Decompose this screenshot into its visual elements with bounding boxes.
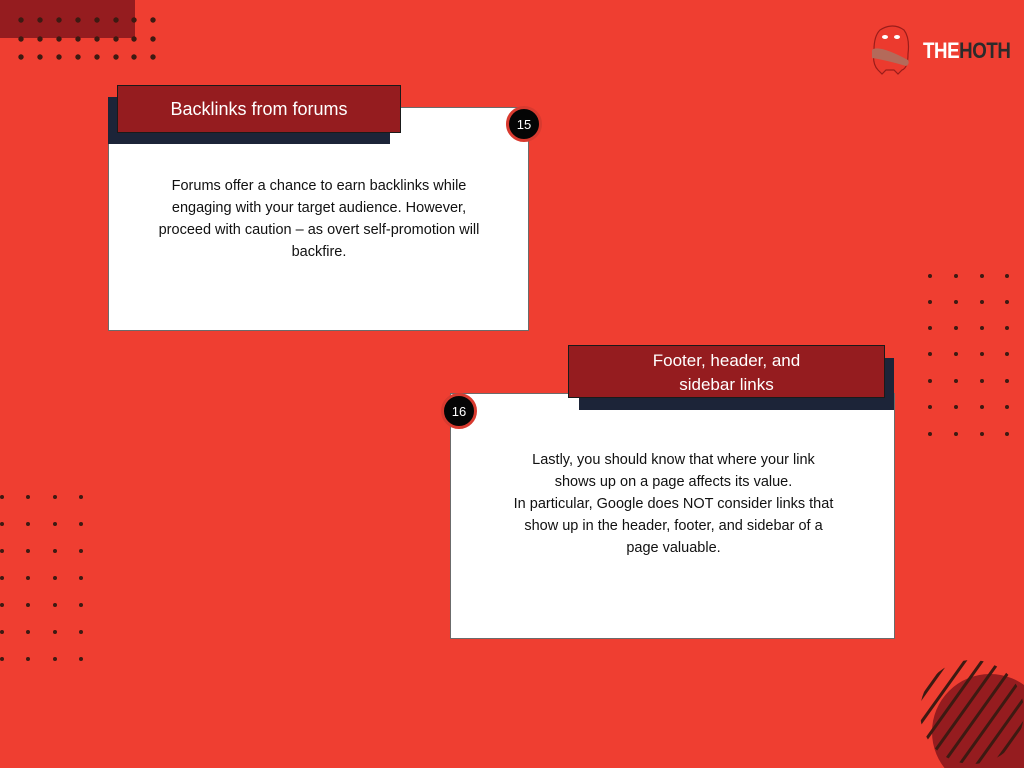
heading	[568, 345, 885, 398]
number badge 15: 15	[517, 116, 531, 132]
card body	[108, 107, 529, 331]
logo	[872, 25, 1010, 75]
card body	[450, 393, 895, 639]
text block: In particular, Google does NOT consider links that	[514, 496, 833, 512]
text block: Lastly, you should know that where your link	[532, 452, 815, 468]
number badge 16	[441, 393, 477, 429]
heading: sidebar links	[679, 375, 774, 394]
number badge 15	[506, 106, 542, 142]
icon: mascot	[872, 25, 910, 75]
text block: Forums offer a chance to earn backlinks while engaging with your target audience. However, proceed with caution – as overt self-promotion will backfire.	[159, 178, 479, 260]
heading: Backlinks from forums	[170, 99, 348, 119]
text block	[514, 452, 834, 556]
text block: shows up on a page affects its value.	[555, 474, 792, 490]
number badge 16: 16	[452, 404, 466, 418]
heading: Footer, header, and	[653, 351, 800, 370]
text block: show up in the header, footer, and sidebar of a	[524, 518, 823, 534]
panel: backlinks from forums	[108, 85, 542, 331]
brand text: THEHOTH	[923, 38, 1010, 63]
text block: page valuable.	[626, 540, 721, 556]
heading	[117, 85, 401, 133]
panel: footer header sidebar links	[441, 345, 895, 639]
